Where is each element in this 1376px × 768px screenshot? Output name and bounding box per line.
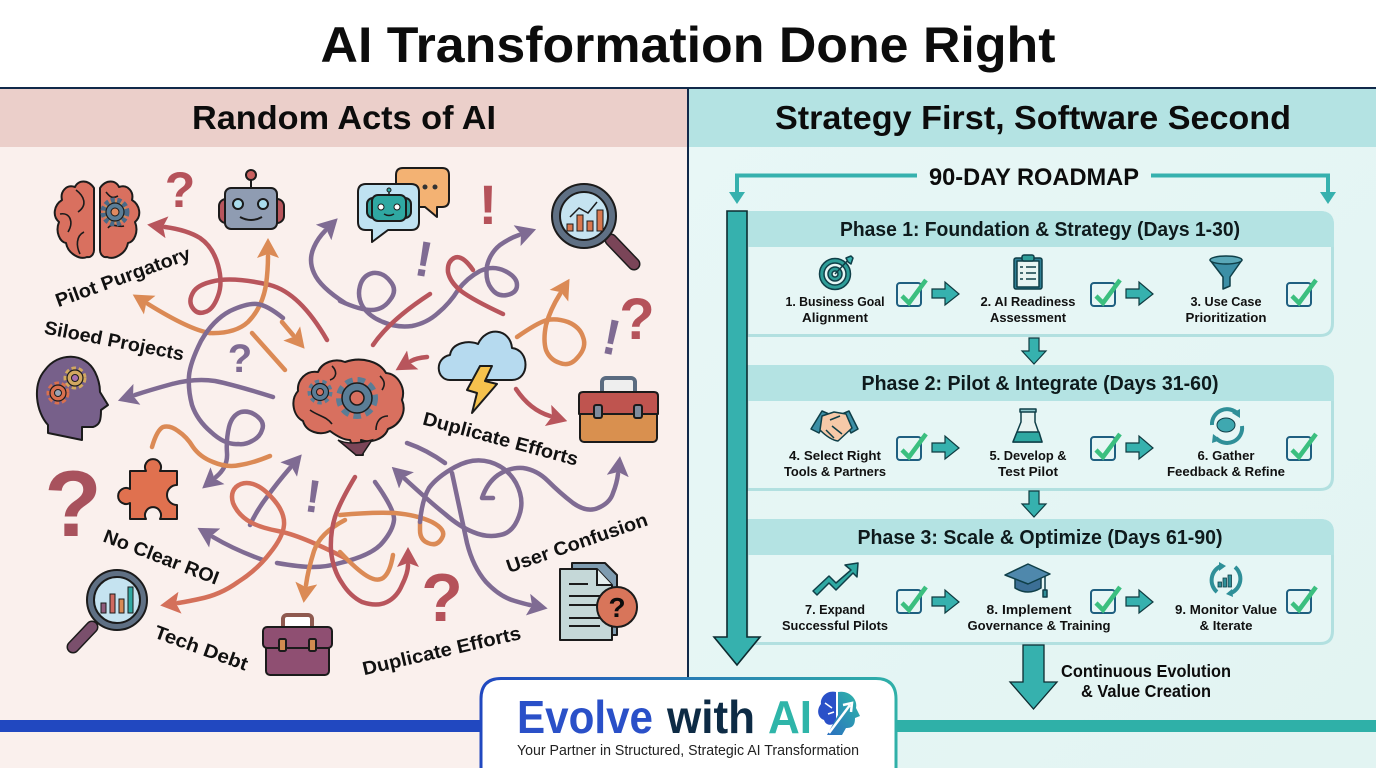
heading band: strategy first: Strategy First, Software Second: [775, 99, 1291, 136]
panel: phase 1: Phase 1: Foundation & Strategy (Days 1-30): [840, 219, 1240, 241]
icon: chat bubbles: [358, 168, 449, 242]
icon: split brain: [55, 182, 139, 258]
brand name: AI: [768, 691, 812, 743]
step 4 label: 4. Select Right: [789, 448, 882, 463]
step 8 label: Governance & Training: [968, 618, 1111, 633]
step 9 label: [1175, 602, 1277, 633]
step 6 label: 6. Gather: [1198, 448, 1254, 463]
chaos labels: [42, 244, 651, 680]
icon: briefcase: [263, 615, 332, 675]
heading band: strategy first: [688, 89, 1376, 147]
step 7 label: [782, 602, 888, 633]
heading band: random acts: Random Acts of AI: [192, 99, 496, 136]
punctuation marks: !: [479, 173, 497, 236]
icon: storm cloud: [439, 332, 526, 413]
step 1 label: [786, 294, 884, 325]
step 2 label: Assessment: [990, 310, 1067, 325]
icon: magnifier with chart: [552, 184, 634, 264]
brand name: [517, 691, 812, 743]
icon: growth arrow: [813, 563, 858, 595]
continuous evolution text: & Value Creation: [1081, 681, 1211, 701]
title: AI Transformation Done Right: [320, 17, 1056, 73]
icon: monitor cycle: [1212, 562, 1240, 597]
step 5 label: [990, 448, 1066, 479]
arrow: roadmap left: [729, 176, 917, 204]
icon: puzzle piece: [118, 459, 177, 519]
punctuation marks: ?: [421, 560, 463, 636]
step 7 label: 7. Expand: [805, 602, 865, 617]
icon: central brain with gears: [293, 360, 404, 455]
step 8 label: 8. Implement: [986, 602, 1072, 617]
icon: target: [820, 256, 853, 290]
step 8 label: [968, 602, 1111, 633]
icon: feedback cycle: [1212, 409, 1242, 443]
icon: toolbox: [579, 378, 658, 442]
tagline: Your Partner in Structured, Strategic AI Transformation: [517, 743, 859, 759]
continuous evolution text: Continuous Evolution: [1061, 661, 1231, 681]
chaos labels: Tech Debt: [151, 622, 251, 676]
checks and arrows: [897, 587, 1316, 613]
centre divider: [687, 87, 689, 679]
punctuation marks: !: [411, 230, 437, 288]
footer bars: [0, 720, 1376, 732]
chaos labels: Duplicate Efforts: [360, 623, 523, 680]
step 5 label: Test Pilot: [998, 464, 1059, 479]
checks and arrows: [897, 434, 1316, 460]
icon: document with question badge: [560, 563, 637, 640]
step 3 label: [1186, 294, 1267, 325]
arrow: phase 2 to 3: [1022, 491, 1046, 517]
arrow: continuous evolution: [1010, 645, 1057, 709]
icon: graduation cap: [1005, 564, 1050, 597]
icon: head with gears: [37, 357, 108, 440]
step 9 label: 9. Monitor Value: [1175, 602, 1277, 617]
step 7 label: Successful Pilots: [782, 618, 888, 633]
continuous evolution text: [1061, 661, 1231, 701]
panel: phase 1: [747, 211, 1334, 336]
icon: robot: [219, 170, 284, 229]
punctuation marks: !: [598, 308, 626, 366]
top rule: [0, 87, 1376, 89]
icon: magnifier with bars: [73, 570, 147, 647]
step 2 label: [980, 294, 1076, 325]
step 4 label: Tools & Partners: [784, 464, 886, 479]
punctuation marks: ?: [228, 337, 252, 381]
icon: brain head logo: [818, 692, 860, 735]
punctuation marks: ?: [619, 287, 655, 352]
chaos labels: User Confusion: [504, 510, 651, 578]
step 3 label: 3. Use Case: [1190, 294, 1262, 309]
icon: funnel: [1210, 256, 1242, 289]
punctuation marks: !: [302, 469, 324, 523]
punctuation marks: [44, 162, 655, 636]
step 2 label: 2. AI Readiness: [980, 294, 1076, 309]
chaos labels: Siloed Projects: [42, 318, 186, 365]
panel: phase 2: Phase 2: Pilot & Integrate (Days 31-60): [862, 373, 1218, 395]
arrow: roadmap right: [1151, 176, 1336, 204]
step 1 label: 1. Business Goal: [786, 294, 884, 309]
roadmap heading: 90-DAY ROADMAP: [929, 164, 1139, 191]
icon: clipboard: [1014, 255, 1042, 289]
panel: phase 2: [747, 365, 1334, 490]
tangled arrows: [135, 227, 618, 605]
brand name: Evolve: [517, 691, 653, 743]
chaos labels: No Clear ROI: [100, 526, 222, 590]
brand panel: [481, 678, 896, 768]
step 4 label: [784, 448, 886, 479]
punctuation marks: ?: [44, 451, 102, 556]
step 9 label: & Iterate: [1200, 618, 1252, 633]
panel: random acts of AI: [0, 88, 688, 768]
panel: phase 3: Phase 3: Scale & Optimize (Days 61-90): [858, 527, 1222, 549]
arrow: timeline: [714, 211, 760, 665]
panel: phase 3: [747, 519, 1334, 644]
panel: strategy first: [688, 88, 1376, 768]
chaos labels: Duplicate Efforts: [420, 409, 580, 471]
step 6 label: Feedback & Refine: [1167, 464, 1285, 479]
brand name: with: [666, 691, 755, 743]
heading band: random acts: [0, 89, 688, 147]
step 6 label: [1167, 448, 1285, 479]
arrow: phase 1 to 2: [1022, 338, 1046, 364]
step 5 label: 5. Develop &: [990, 448, 1066, 463]
icon: document with question badge: ?: [608, 592, 626, 623]
step 3 label: Prioritization: [1186, 310, 1267, 325]
checks and arrows: [897, 280, 1316, 306]
icon: flask: [1013, 409, 1042, 442]
icon: handshake: [811, 411, 858, 441]
step 1 label: Alignment: [802, 310, 869, 325]
punctuation marks: ?: [165, 162, 195, 218]
chaos labels: Pilot Purgatory: [53, 244, 194, 312]
